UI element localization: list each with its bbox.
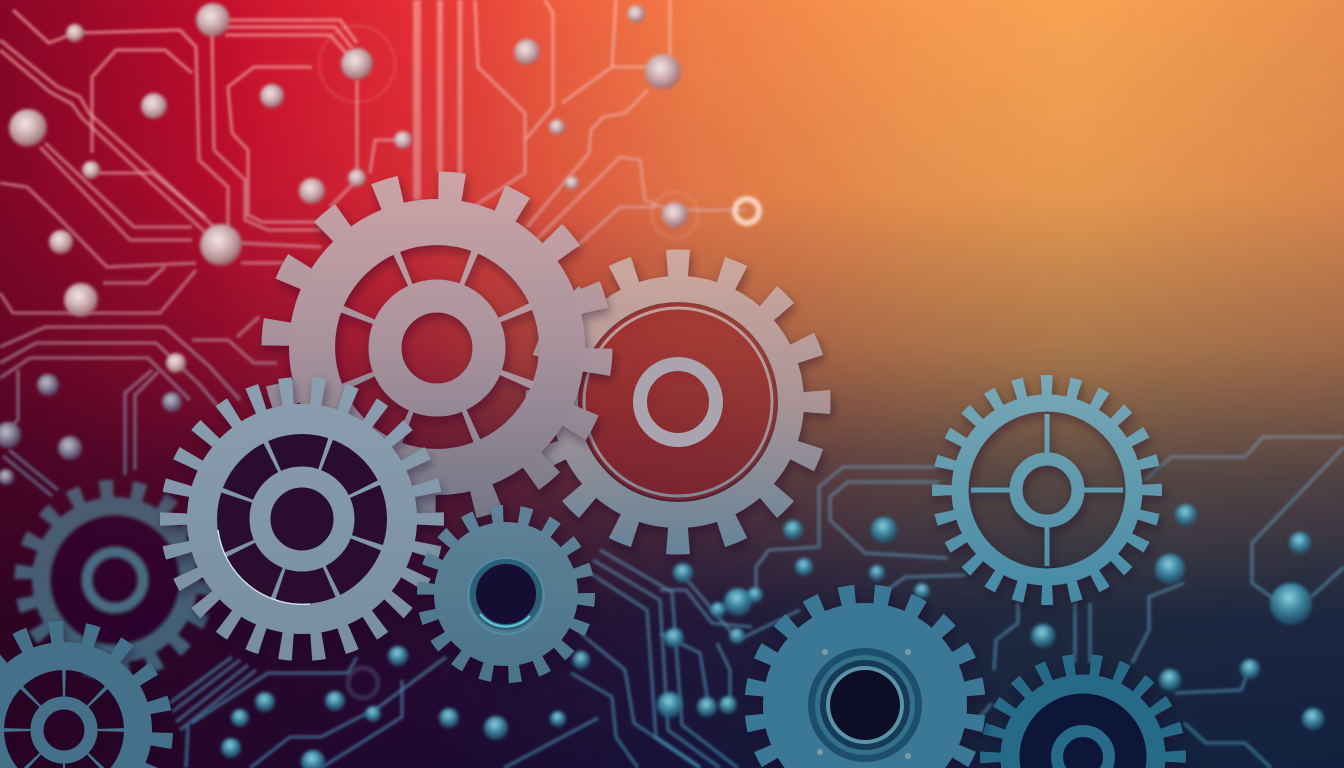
circuit nodes: lower teal spheres (221, 504, 1324, 768)
gear: small steel blue with ring hole (422, 510, 590, 678)
gear: dark blurred left (16, 481, 214, 679)
gear: bottom-right dark teal (991, 665, 1175, 768)
gear: large rose centre-right (539, 263, 817, 541)
gear: teal right with four spokes (943, 386, 1151, 594)
gear: large rose top (263, 173, 611, 521)
gear: textured silver front (174, 391, 430, 647)
gear: bottom-left blue (0, 622, 172, 768)
gear: bottom-centre blue with bearing (739, 579, 991, 768)
gear rim highlight (218, 530, 310, 604)
circuit nodes: mid grey spheres (0, 374, 182, 485)
bearing hub (808, 648, 922, 762)
circuit nodes: upper blurred spheres (9, 3, 688, 373)
circuit node: ring terminal (735, 199, 759, 223)
halo rings around nodes (319, 26, 698, 698)
